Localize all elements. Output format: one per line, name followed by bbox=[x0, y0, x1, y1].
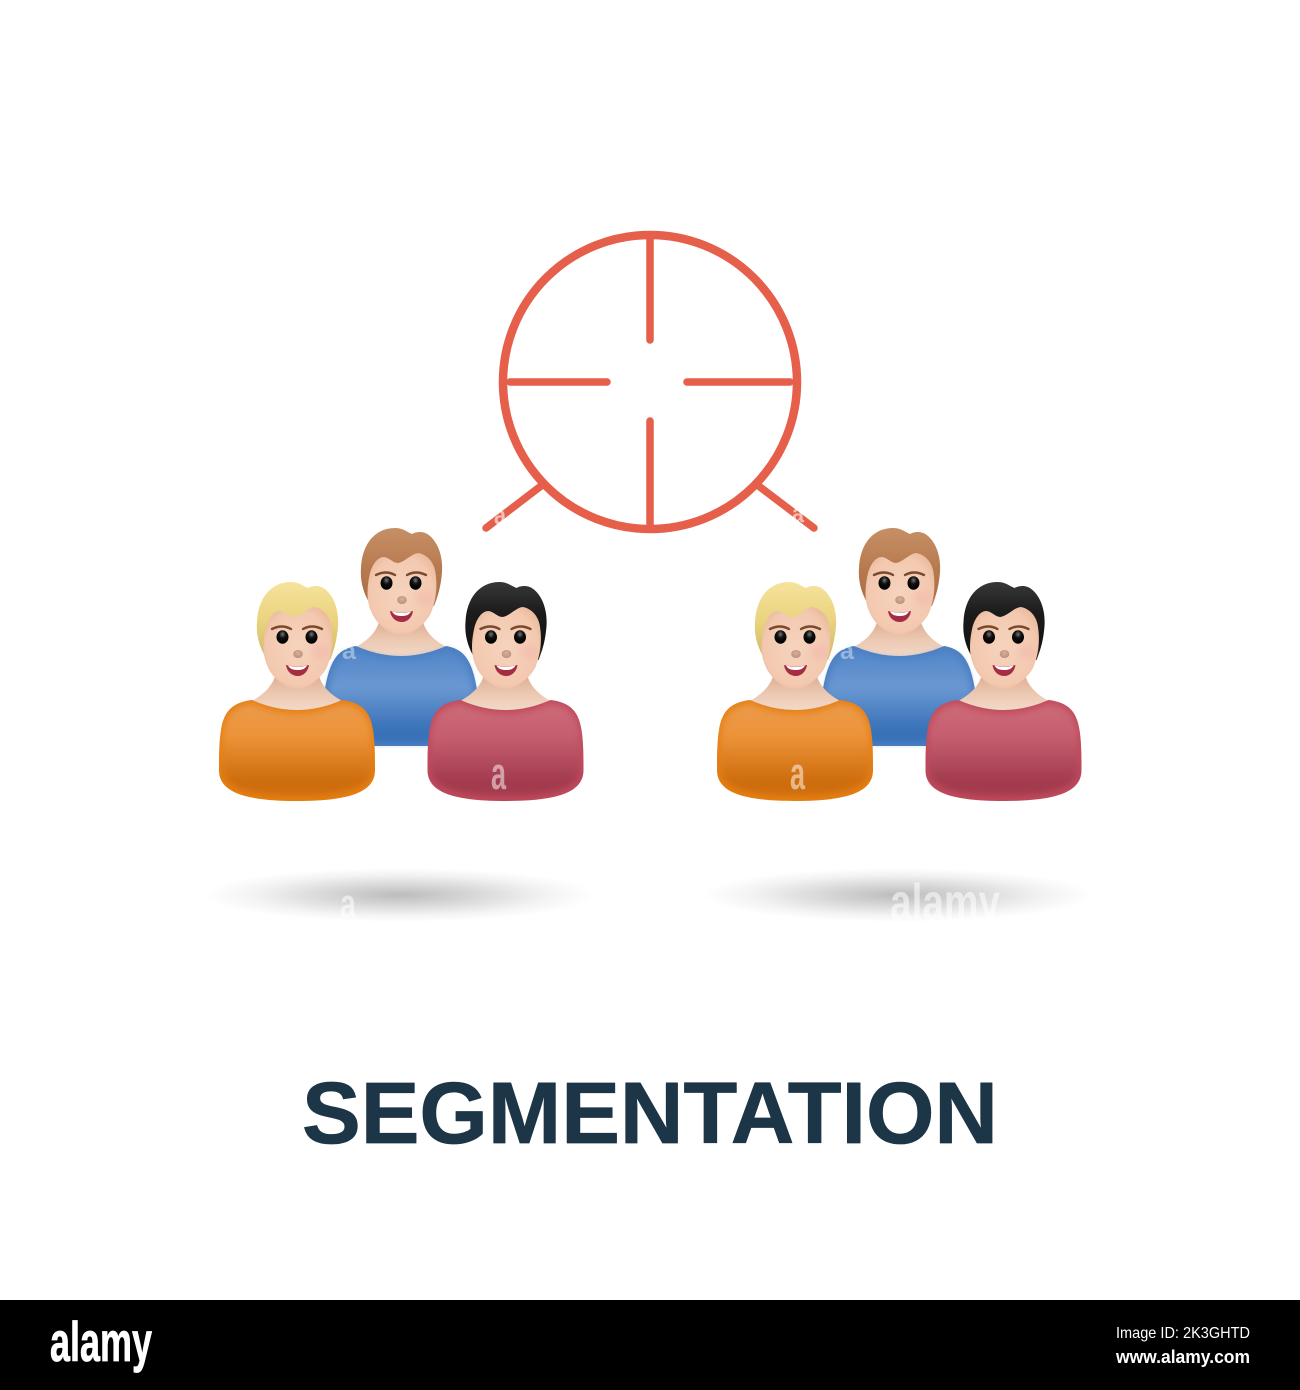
watermark fragments on legs bbox=[494, 498, 804, 530]
watermark letter on red shirt: a bbox=[491, 748, 507, 799]
title: SEGMENTATION bbox=[302, 1065, 998, 1162]
crosshair lines bbox=[510, 237, 790, 527]
right leg bbox=[760, 487, 814, 528]
footer bar bbox=[0, 1300, 1300, 1390]
target ring bbox=[503, 235, 797, 529]
watermark letter on orange shirt: a bbox=[790, 748, 806, 799]
watermark on right shadow: alamy bbox=[890, 874, 1000, 932]
left leg bbox=[486, 486, 541, 528]
watermark on left shadow: a bbox=[340, 880, 356, 927]
left group of people bbox=[219, 528, 584, 801]
watermark fragments on legs: a bbox=[494, 500, 506, 530]
right group of people bbox=[717, 528, 1082, 801]
icon: target crosshair bbox=[486, 235, 814, 530]
watermark fragments on legs: a bbox=[792, 498, 804, 528]
image id: Image ID: 2K3GHTD bbox=[1116, 1325, 1250, 1342]
left ground shadow bbox=[205, 868, 595, 922]
right ground shadow bbox=[703, 868, 1093, 922]
alamy logo: alamy bbox=[50, 1310, 152, 1373]
website: www.alamy.com bbox=[1115, 1347, 1250, 1367]
